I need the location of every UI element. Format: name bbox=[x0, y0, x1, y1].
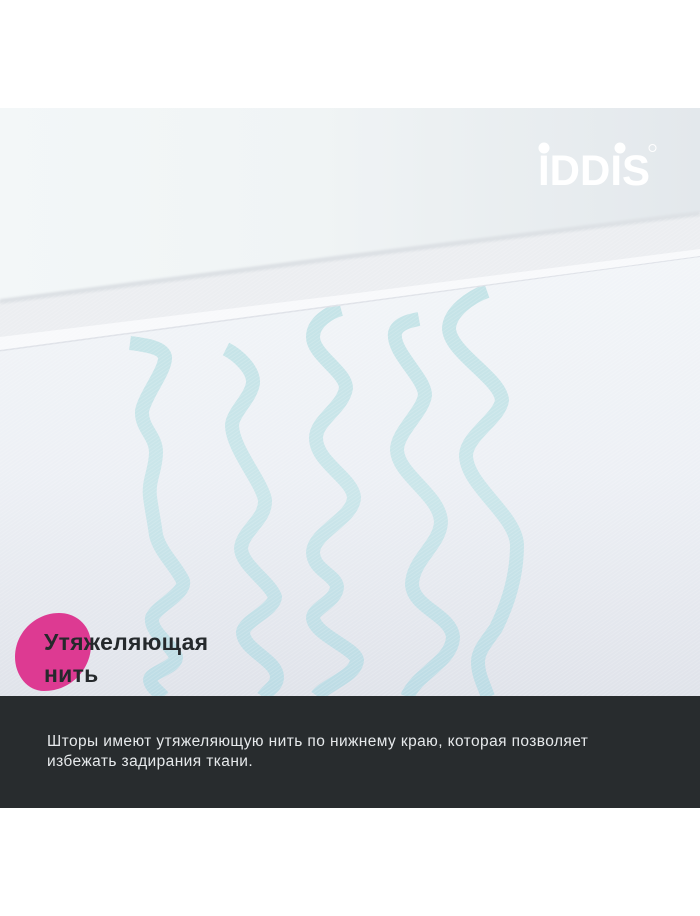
wall shadow at hem edge bbox=[0, 211, 700, 304]
heading bbox=[44, 629, 208, 687]
heading: нить bbox=[44, 661, 99, 687]
heading: Утяжеляющая bbox=[44, 629, 208, 655]
hem fold bbox=[0, 212, 700, 345]
logo: iddis: IDDIS bbox=[538, 147, 650, 195]
fabric weave texture bbox=[0, 214, 700, 696]
hem stitch band bbox=[0, 249, 700, 350]
curtain fabric bbox=[0, 248, 700, 696]
wavy threads bbox=[130, 291, 517, 697]
body text bbox=[47, 733, 588, 770]
body text: избежать задирания ткани. bbox=[47, 753, 253, 770]
background wall bbox=[0, 108, 700, 318]
dark text panel bbox=[0, 696, 700, 808]
photo: curtain with wavy weighted threads bbox=[0, 108, 700, 696]
body text: Шторы имеют утяжеляющую нить по нижнему краю, которая позволяет bbox=[47, 733, 588, 750]
pink blob accent bbox=[15, 613, 91, 691]
